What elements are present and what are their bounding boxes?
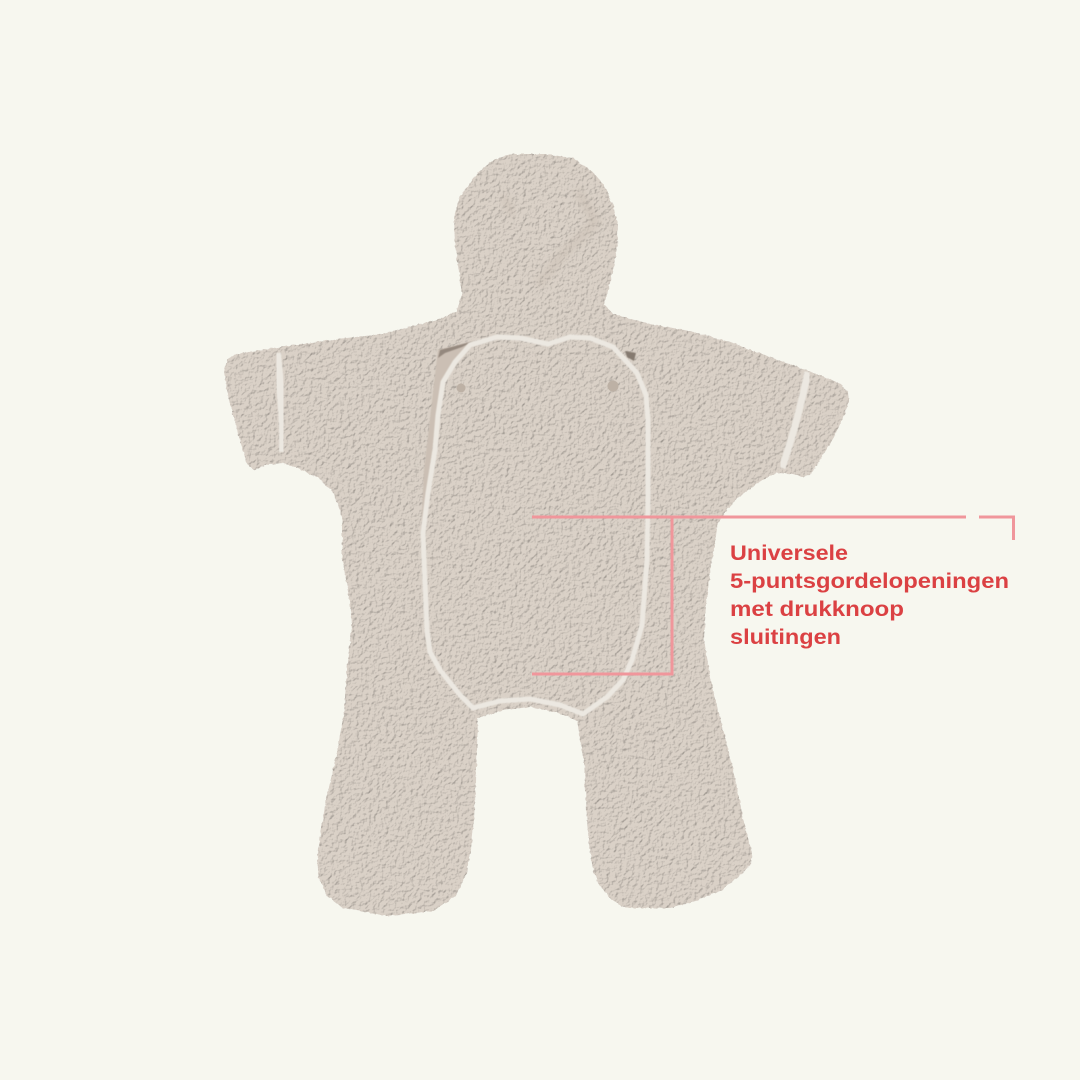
callout text bbox=[730, 541, 1009, 649]
hood crease shading, left bbox=[503, 195, 513, 215]
bracket enclosing the belt opening bbox=[532, 517, 672, 674]
dark shadow at opening, left bbox=[438, 341, 474, 358]
back panel piping bbox=[423, 337, 648, 714]
hood crease shading, right bbox=[538, 190, 596, 285]
callout text: met drukknoop bbox=[730, 597, 904, 621]
callout bracket lines bbox=[532, 517, 1014, 674]
callout text: Universele bbox=[730, 541, 848, 565]
left sleeve cuff piping bbox=[277, 353, 283, 452]
product: teddy fleece baby suit, back view bbox=[225, 155, 848, 915]
right sleeve cuff piping bbox=[782, 372, 808, 468]
callout text: sluitingen bbox=[730, 625, 841, 649]
callout text: 5-puntsgordelopeningen bbox=[730, 569, 1009, 593]
dark shadow at opening, right bbox=[625, 351, 636, 361]
top line to label bbox=[532, 516, 966, 518]
corner bracket bbox=[979, 517, 1014, 540]
left snap button bbox=[456, 384, 466, 392]
suit body with hood, sleeves and legs bbox=[225, 155, 848, 915]
right snap button bbox=[608, 380, 618, 392]
lining visible at the opening bbox=[421, 342, 470, 535]
